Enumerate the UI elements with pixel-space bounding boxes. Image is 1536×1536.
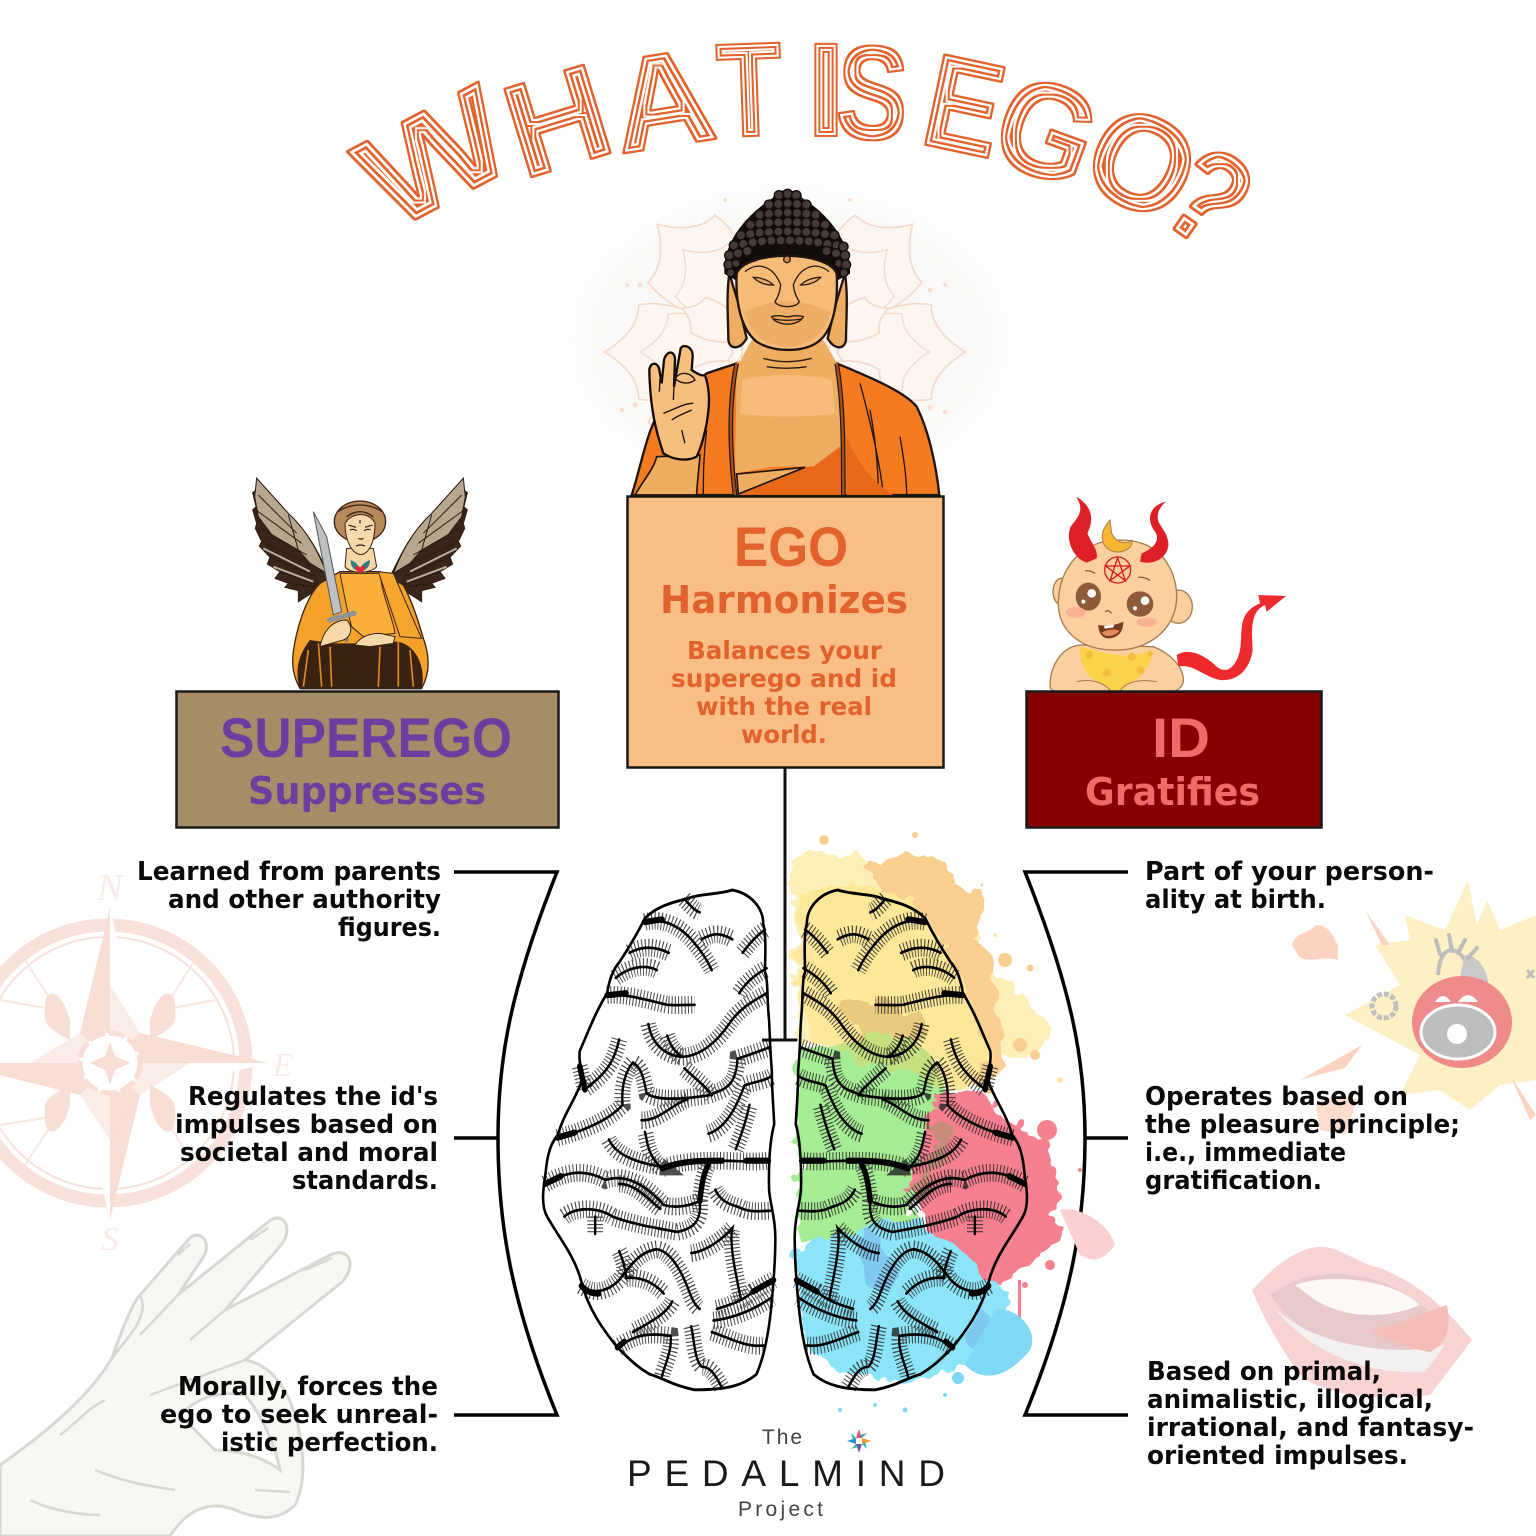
sash [737,447,843,495]
text block: morally forces: Morally, forces the [178,1372,438,1402]
text block: morally forces: istic perfection. [221,1428,438,1458]
title: S [833,16,912,170]
left hemisphere [543,890,775,1390]
face [736,256,837,350]
Id box [1026,692,1322,828]
Superego box [176,692,558,828]
ears [1053,578,1070,605]
Ego box: superego and id [671,664,897,693]
text block: pleasure principle: i.e., immediate [1145,1138,1346,1168]
raised hand [635,455,700,495]
head [334,501,386,542]
watercolor splash behind right brain [795,853,1057,1380]
Id box: Gratifies [1085,770,1260,814]
connector from ego box to brain [762,768,806,1040]
paint spatter dots [819,832,1115,1412]
title: W [333,56,536,259]
Ego box: Balances your [687,636,883,665]
ears [728,273,747,347]
neck and heart tattoo [345,548,377,572]
Superego box: Suppresses [248,769,486,813]
text block: primal impulses [1147,1357,1474,1471]
title: T [714,13,785,166]
head [1058,540,1177,650]
text block: pleasure principle: Operates based on [1145,1082,1408,1112]
title: G [976,45,1118,218]
background illustration: compass rose: E [272,1047,294,1084]
text block: part of personality: ality at birth. [1145,885,1326,915]
background illustration: screaming devil head in burst [1292,880,1536,1135]
facial features [745,256,829,324]
left bracket [454,872,557,1415]
mouth [1098,622,1123,638]
text block: pleasure principle: the pleasure principle; [1145,1110,1460,1140]
background illustration: compass rose: S [102,1221,118,1258]
Ego box: world. [741,720,827,749]
title [333,13,1280,279]
title: E [912,25,1017,187]
superego description text [137,857,441,1458]
text block: pleasure principle [1145,1082,1460,1196]
text block: pleasure principle: gratification. [1145,1166,1322,1196]
title: ? [1137,116,1280,279]
Ego box: Harmonizes [660,578,908,622]
Ego box: with the real [696,692,872,721]
sword [313,512,342,615]
text block: learned from parents [137,857,441,943]
logo flower icon [847,1429,871,1453]
Id box: ID [1152,706,1210,769]
hands [320,620,351,647]
cheeks [1066,607,1086,618]
text block: learned from parents: figures. [338,913,441,943]
title: H [487,35,628,208]
text block: learned from parents: Learned from parents [137,857,441,887]
id description text [1145,857,1474,1471]
text block: part of personality [1145,857,1434,915]
text block: primal impulses: animalistic, illogical, [1147,1385,1433,1415]
text block: morally forces [160,1372,438,1458]
text block: learned from parents: and other authority [168,885,441,915]
Pedalmind logo: The [762,1426,804,1449]
text block: regulates impulses: standards. [292,1166,438,1196]
Ego box: EGO [734,515,848,578]
background illustration: compass rose: N [96,867,125,909]
tail [1177,595,1286,680]
wings [253,478,467,602]
background illustration: OK hand gesture [0,1218,350,1536]
text block: primal impulses: irrational, and fantasy- [1147,1413,1474,1443]
body [1050,645,1183,694]
torso and cape [293,572,428,688]
brain illustration [543,890,1027,1390]
hair curls [724,189,851,280]
text block: regulates impulses: societal and moral [180,1138,438,1168]
background illustration: lips and tongue [1252,1247,1472,1398]
horns [1069,497,1097,563]
neck [740,340,837,369]
title: I [806,14,846,165]
text block: morally forces: ego to seek unreal- [160,1400,438,1430]
Superego angel figure [253,478,467,689]
text block: primal impulses: Based on primal, [1147,1357,1381,1387]
text block: part of personality: Part of your person- [1145,857,1434,887]
text block: primal impulses: oriented impulses. [1147,1441,1408,1471]
Superego box: SUPEREGO [220,706,512,769]
Pedalmind logo [627,1426,945,1521]
eyes [1076,583,1101,611]
text block: regulates impulses [175,1082,438,1196]
right hemisphere [795,890,1027,1390]
Ego box [628,496,944,768]
Pedalmind logo: Project [738,1498,823,1521]
robe [632,360,939,495]
Pedalmind logo: PEDALMIND [627,1453,945,1494]
title: O [1061,73,1222,253]
bare chest [735,356,843,473]
mandala background [575,189,1005,514]
Buddha figure with mandala [575,189,1005,514]
text block: regulates impulses: Regulates the id's [188,1082,438,1112]
right bracket [1025,872,1128,1415]
hair curl [1102,520,1132,552]
Id devil baby figure [1050,497,1286,694]
pentagram [1105,557,1131,583]
title: A [601,20,725,183]
text block: regulates impulses: impulses based on [175,1110,438,1140]
background illustration: compass rose [0,867,294,1258]
